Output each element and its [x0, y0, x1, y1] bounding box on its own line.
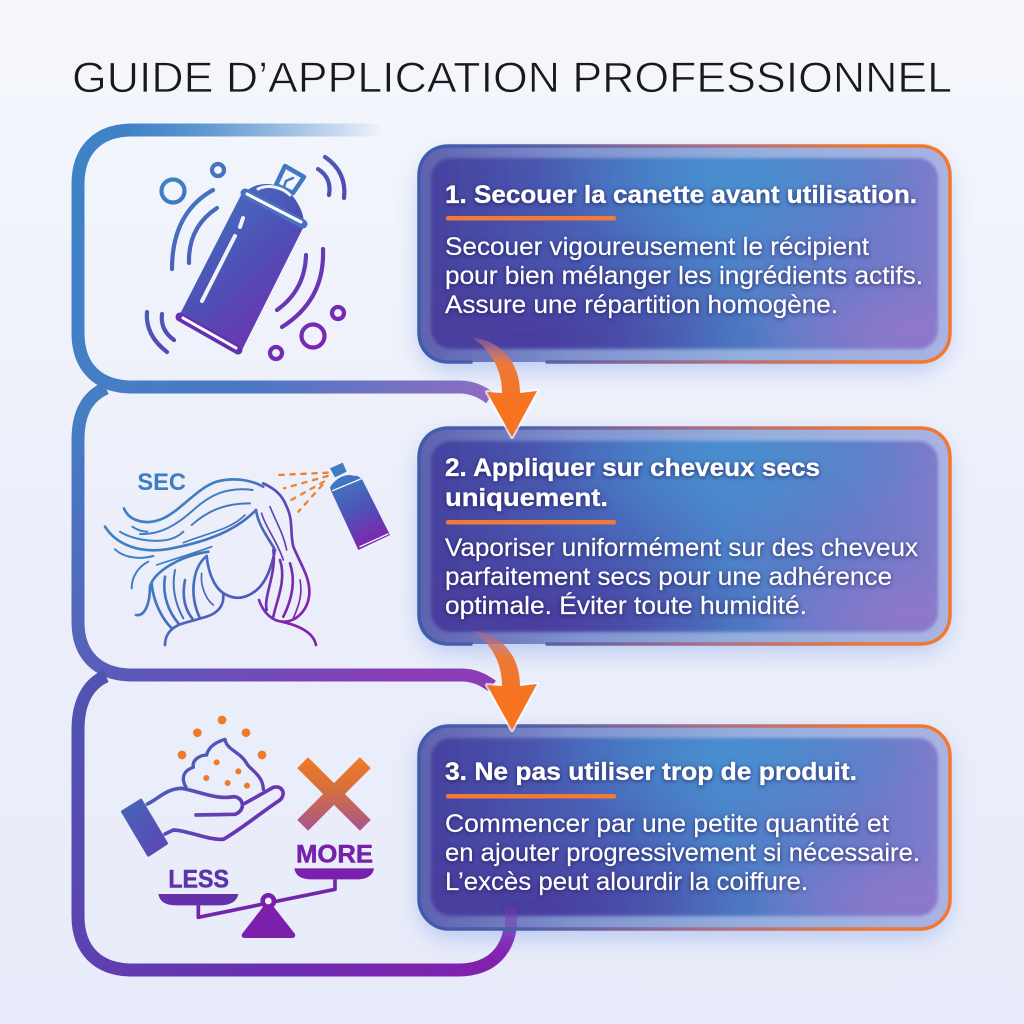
panel: step 2 card [419, 428, 950, 644]
foam dots [178, 716, 266, 789]
step 1 body text [445, 233, 923, 319]
motion arcs and bubbles [147, 157, 344, 359]
card glass frame [419, 428, 950, 644]
step 1 body text: Secouer vigoureusement le récipient [445, 233, 869, 261]
balance scale [158, 868, 374, 938]
card inner surface [431, 158, 938, 349]
spray droplets [278, 473, 328, 512]
step 2 heading: uniquement. [445, 484, 608, 512]
cross [303, 763, 365, 825]
step 2 body text: parfaitement secs pour une adhérence [445, 563, 892, 591]
step 2 body text [445, 534, 919, 620]
card inner surface [431, 738, 938, 916]
panel: step 1 card [419, 146, 950, 362]
label LESS: LESS [168, 865, 229, 893]
arrow: step 1 to step 2 [473, 338, 537, 437]
step 3 heading: 3. Ne pas utiliser trop de produit. [445, 758, 857, 786]
card border [419, 146, 950, 362]
small spray can [330, 463, 390, 550]
flow frame: step 2 [78, 388, 492, 686]
step 2 body text: optimale. Éviter toute humidité. [445, 591, 807, 620]
step 2 heading [445, 454, 820, 512]
arrow: step 2 to step 3 [473, 631, 537, 730]
step 1 heading rule [446, 216, 616, 220]
can dome [245, 184, 304, 224]
hair strands [105, 479, 316, 645]
title: GUIDE D’APPLICATION PROFESSIONNEL [72, 54, 952, 102]
step 1 heading: 1. Secouer la canette avant utilisation. [445, 181, 917, 209]
step 3 body text: L’excès peut alourdir la coiffure. [445, 868, 808, 896]
card inner surface [431, 441, 938, 632]
step 3 heading rule [446, 794, 616, 798]
can body [179, 195, 304, 350]
step 1 body text: Assure une répartition homogène. [445, 291, 838, 319]
card border [419, 726, 950, 929]
icon: shaking spray can [147, 157, 344, 359]
step 3 body text [445, 810, 920, 896]
flow frame: step 1 [78, 130, 490, 398]
label MORE: MORE [296, 840, 373, 868]
step 3 body text: Commencer par une petite quantité et [445, 810, 889, 838]
step 2 heading: 2. Appliquer sur cheveux secs [445, 454, 820, 482]
foam [183, 739, 263, 789]
hand [147, 787, 283, 839]
icon: hair and spray [105, 463, 390, 645]
step 1 body text: pour bien mélanger les ingrédients actifs. [445, 262, 923, 290]
icon: less is more scale [122, 716, 374, 938]
frame passing behind glass [505, 908, 517, 928]
card glass frame [419, 146, 950, 362]
flow frame: step 3 [78, 676, 511, 970]
card shadows [420, 156, 948, 937]
label SEC: SEC [137, 469, 186, 496]
panel: step 3 card [419, 726, 950, 929]
can nozzle [276, 166, 304, 193]
step 2 body text: Vaporiser uniformément sur des cheveux [445, 534, 919, 562]
card border [419, 428, 950, 644]
card glass frame [419, 726, 950, 929]
step 3 body text: en ajouter progressivement si nécessaire. [445, 839, 920, 867]
step 2 heading rule [446, 520, 616, 524]
sleeve cuff [122, 800, 167, 855]
can highlights [180, 178, 303, 350]
